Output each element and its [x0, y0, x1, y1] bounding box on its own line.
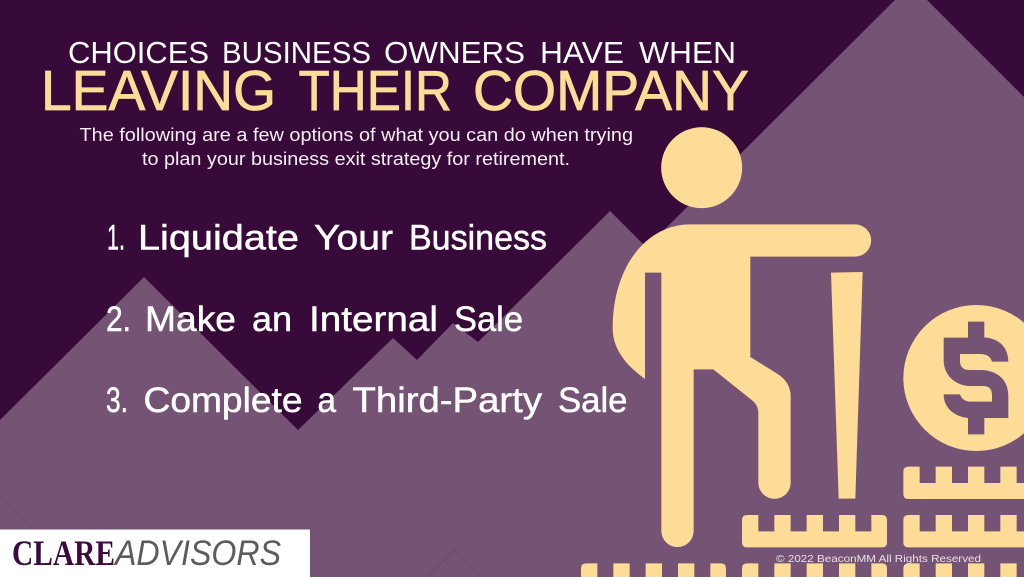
- intro text: to plan your business exit strategy for retirement.: [142, 149, 570, 169]
- title line 1: [68, 36, 736, 70]
- icon: dollar coin: [903, 305, 1024, 451]
- icon: coin stacks steps: [581, 467, 1024, 577]
- head: [661, 127, 742, 208]
- option 2: Internal: [309, 300, 438, 339]
- option 3: a: [318, 381, 337, 420]
- title line 1: OWNERS: [384, 36, 525, 70]
- cane: [831, 272, 863, 499]
- title line 1: BUSINESS: [222, 36, 371, 70]
- title: [41, 36, 749, 122]
- option 1: Liquidate: [138, 218, 299, 258]
- option 2: 2.: [106, 300, 131, 339]
- options list: [106, 218, 628, 420]
- option 2: Make: [145, 300, 236, 339]
- option 1: Business: [409, 218, 547, 258]
- title line 2: COMPANY: [473, 59, 749, 122]
- logo: Clare Advisors: [0, 530, 310, 577]
- option 3: Third-Party: [352, 381, 543, 420]
- option 1: 1.: [107, 218, 125, 258]
- option 3: Complete: [144, 381, 302, 420]
- option 2: [106, 300, 523, 339]
- intro text: The following are a few options of what you can do when trying: [80, 125, 633, 145]
- option 2: an: [252, 300, 292, 339]
- option 3: Sale: [558, 381, 628, 420]
- option 2: Sale: [454, 300, 523, 339]
- title line 2: THEIR: [298, 59, 452, 122]
- body: [613, 224, 871, 547]
- icon: retiree with cane: [613, 127, 871, 547]
- title line 2: [41, 59, 749, 122]
- option 1: [107, 218, 547, 258]
- option 3: [106, 381, 628, 420]
- intro text: [80, 125, 633, 169]
- title line 1: WHEN: [639, 36, 736, 70]
- logo: Clare Advisors: CLARE: [12, 533, 115, 573]
- title line 1: HAVE: [540, 36, 624, 70]
- logo: Clare Advisors: ADVISORS: [113, 534, 281, 573]
- title line 1: CHOICES: [68, 36, 209, 70]
- option 3: 3.: [106, 381, 128, 420]
- title line 2: LEAVING: [41, 59, 276, 122]
- option 1: Your: [314, 218, 393, 258]
- copyright: © 2022 BeaconMM All Rights Reserved: [776, 553, 981, 565]
